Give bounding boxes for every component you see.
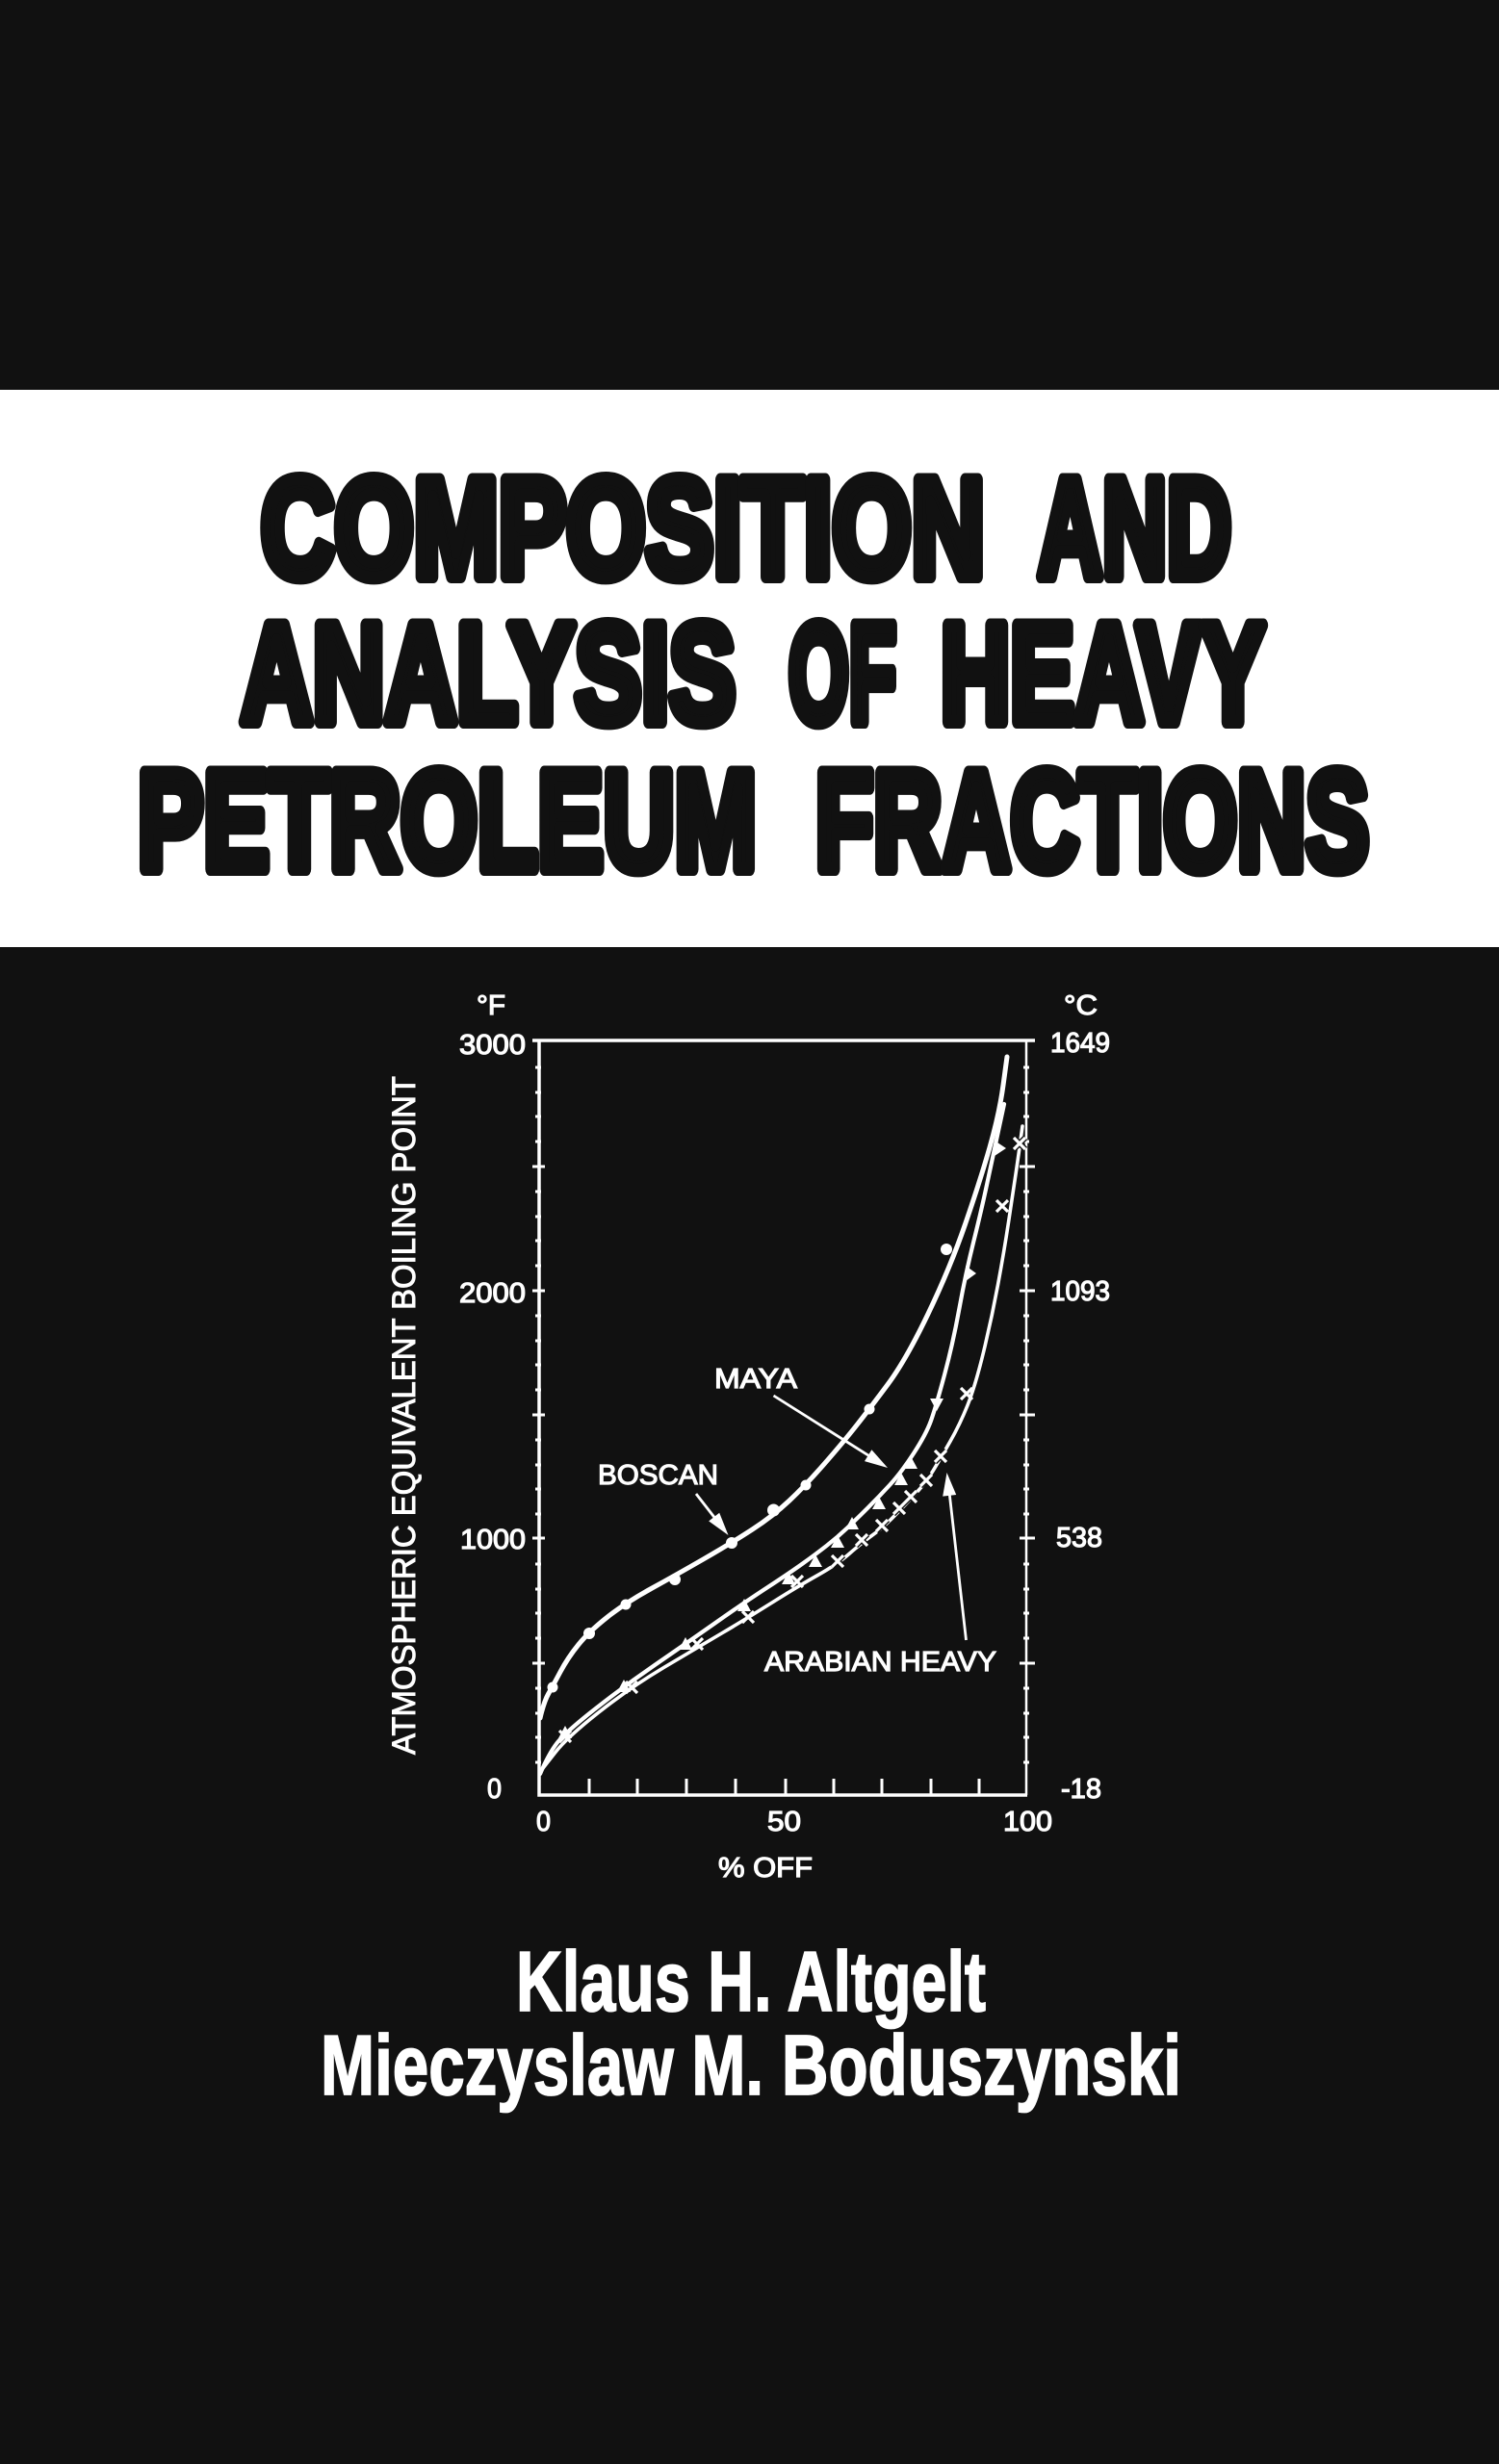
celsius scale: -18	[1061, 1774, 1101, 1805]
title line 2: HEAVY	[941, 595, 1265, 752]
curve: Maya	[540, 1104, 1004, 1774]
callout: Arabian Heavy: ARABIAN HEAVY	[764, 1647, 996, 1678]
curve: Boscan	[540, 1057, 1007, 1718]
title	[138, 449, 1369, 899]
x axis scale: 50	[767, 1807, 801, 1837]
marker halos: gaps around Arabian Heavy crosses	[832, 1138, 1025, 1567]
title line 1: AND	[1038, 449, 1231, 606]
panel: white title band	[0, 390, 1499, 947]
chart axes and frame	[532, 1040, 1035, 1795]
markers: Maya triangles	[558, 1141, 1006, 1738]
chart: boiling point curves	[386, 990, 1110, 1884]
x axis scale: 100	[1003, 1807, 1052, 1837]
x axis scale: 0	[536, 1807, 551, 1837]
fahrenheit scale: °F	[477, 990, 505, 1021]
celsius scale: 538	[1056, 1523, 1102, 1553]
fahrenheit scale: 0	[487, 1774, 502, 1805]
fahrenheit scale: 3000	[459, 1030, 526, 1061]
author 1: Klaus H. Altgelt	[516, 1934, 986, 2029]
celsius scale	[1050, 990, 1110, 1805]
celsius scale: 1093	[1050, 1276, 1110, 1307]
celsius scale: 1649	[1050, 1028, 1110, 1059]
callout: Maya	[714, 1364, 888, 1468]
authors	[321, 1934, 1181, 2113]
y axis title: ATMOSPHERIC EQUIVALENT BOILING POINT	[386, 1076, 423, 1755]
title line 2: ANALYSIS	[241, 595, 736, 752]
callout: Maya: MAYA	[714, 1364, 798, 1395]
markers: Boscan dots	[547, 1244, 952, 1692]
celsius scale: °C	[1064, 990, 1098, 1021]
fahrenheit scale	[459, 990, 526, 1805]
title line 2	[241, 595, 1265, 752]
fahrenheit scale: 1000	[460, 1525, 526, 1555]
x axis title: % OFF	[718, 1853, 813, 1884]
markers: Arabian Heavy crosses	[559, 1138, 1025, 1742]
callout: Arabian Heavy	[764, 1473, 996, 1678]
author 2: Mieczyslaw M. Boduszynski	[321, 2017, 1181, 2113]
title line 2: OF	[788, 595, 896, 752]
curve: Arabian Heavy	[543, 1126, 1022, 1768]
callout: Boscan	[598, 1460, 728, 1535]
x axis scale	[536, 1807, 1052, 1837]
title line 1: COMPOSITION	[261, 449, 985, 606]
fahrenheit scale: 2000	[459, 1278, 526, 1309]
title line 3: PETROLEUM	[138, 742, 757, 899]
callout: Boscan: BOSCAN	[598, 1460, 718, 1491]
